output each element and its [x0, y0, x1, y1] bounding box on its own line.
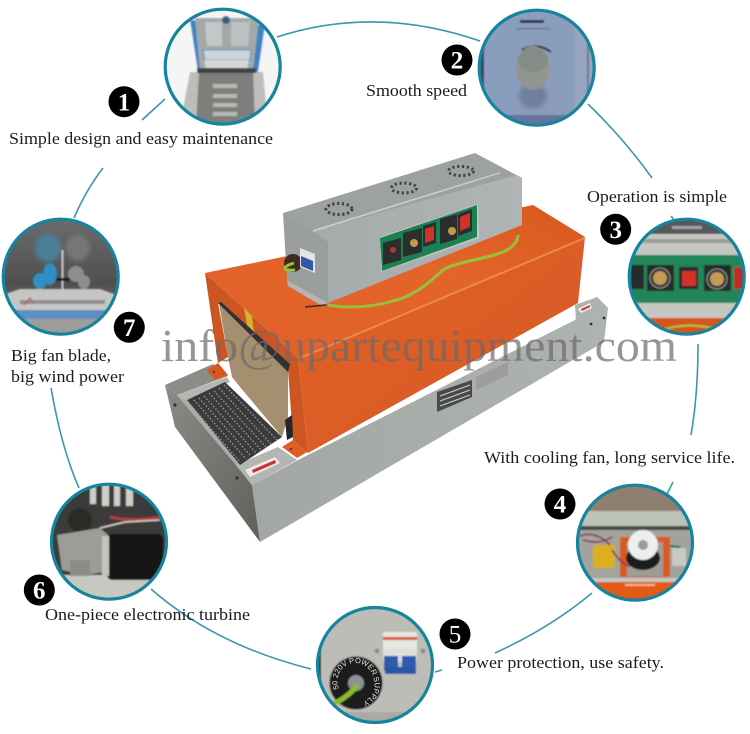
badge 7 [114, 312, 145, 343]
control panel [380, 204, 479, 272]
feature 1: photo circle [164, 8, 282, 126]
badge 3: 3 [609, 217, 622, 244]
orange tunnel top [205, 205, 585, 358]
label 2: Smooth speed [366, 81, 468, 100]
label 3: Operation is simple [587, 187, 727, 206]
badge 6: 6 [33, 578, 46, 604]
badge 5: 5 [449, 622, 461, 648]
label 7: big wind power [11, 367, 125, 386]
feature 5: photo circle [316, 606, 434, 724]
orange tunnel end with curtain [205, 273, 308, 453]
conveyor mesh belt [187, 382, 282, 465]
vent holes [326, 166, 474, 214]
label 7: Big fan blade, [11, 346, 111, 365]
badge 2 [442, 44, 472, 76]
feature 4: photo circle [575, 484, 695, 604]
feature 7: photo circle [2, 218, 120, 336]
conveyor labels [245, 303, 592, 477]
badge 3 [600, 214, 631, 245]
label 5: Power protection, use safety. [457, 653, 664, 672]
control box [283, 153, 522, 306]
feature 6: photo circle [50, 484, 170, 600]
rating plates [437, 362, 508, 412]
label 1: Simple design and easy maintenance [9, 129, 273, 148]
side breaker [284, 248, 328, 306]
watermark: info@upartequipment.com [161, 320, 677, 371]
feature 3: photo circle [625, 215, 750, 340]
badge 4 [544, 488, 576, 520]
badge 6 [24, 574, 55, 606]
label 6: One-piece electronic turbine [45, 605, 250, 624]
feature 5: photo circle: 50 220V POWER SUPPLY [332, 658, 380, 706]
label 7 [11, 346, 125, 386]
badge 4: 4 [554, 492, 567, 518]
green earth wire [285, 235, 518, 307]
badge 2: 2 [451, 48, 463, 74]
machine base [165, 297, 608, 542]
badge 1: 1 [118, 90, 130, 116]
badge 7: 7 [123, 315, 136, 342]
badge 5 [440, 618, 470, 650]
feature 2: photo circle [478, 8, 596, 127]
orange tunnel front [298, 237, 585, 453]
connecting ring arcs [51, 22, 698, 672]
label 4: With cooling fan, long service life. [484, 448, 735, 467]
badge 1 [108, 86, 140, 117]
